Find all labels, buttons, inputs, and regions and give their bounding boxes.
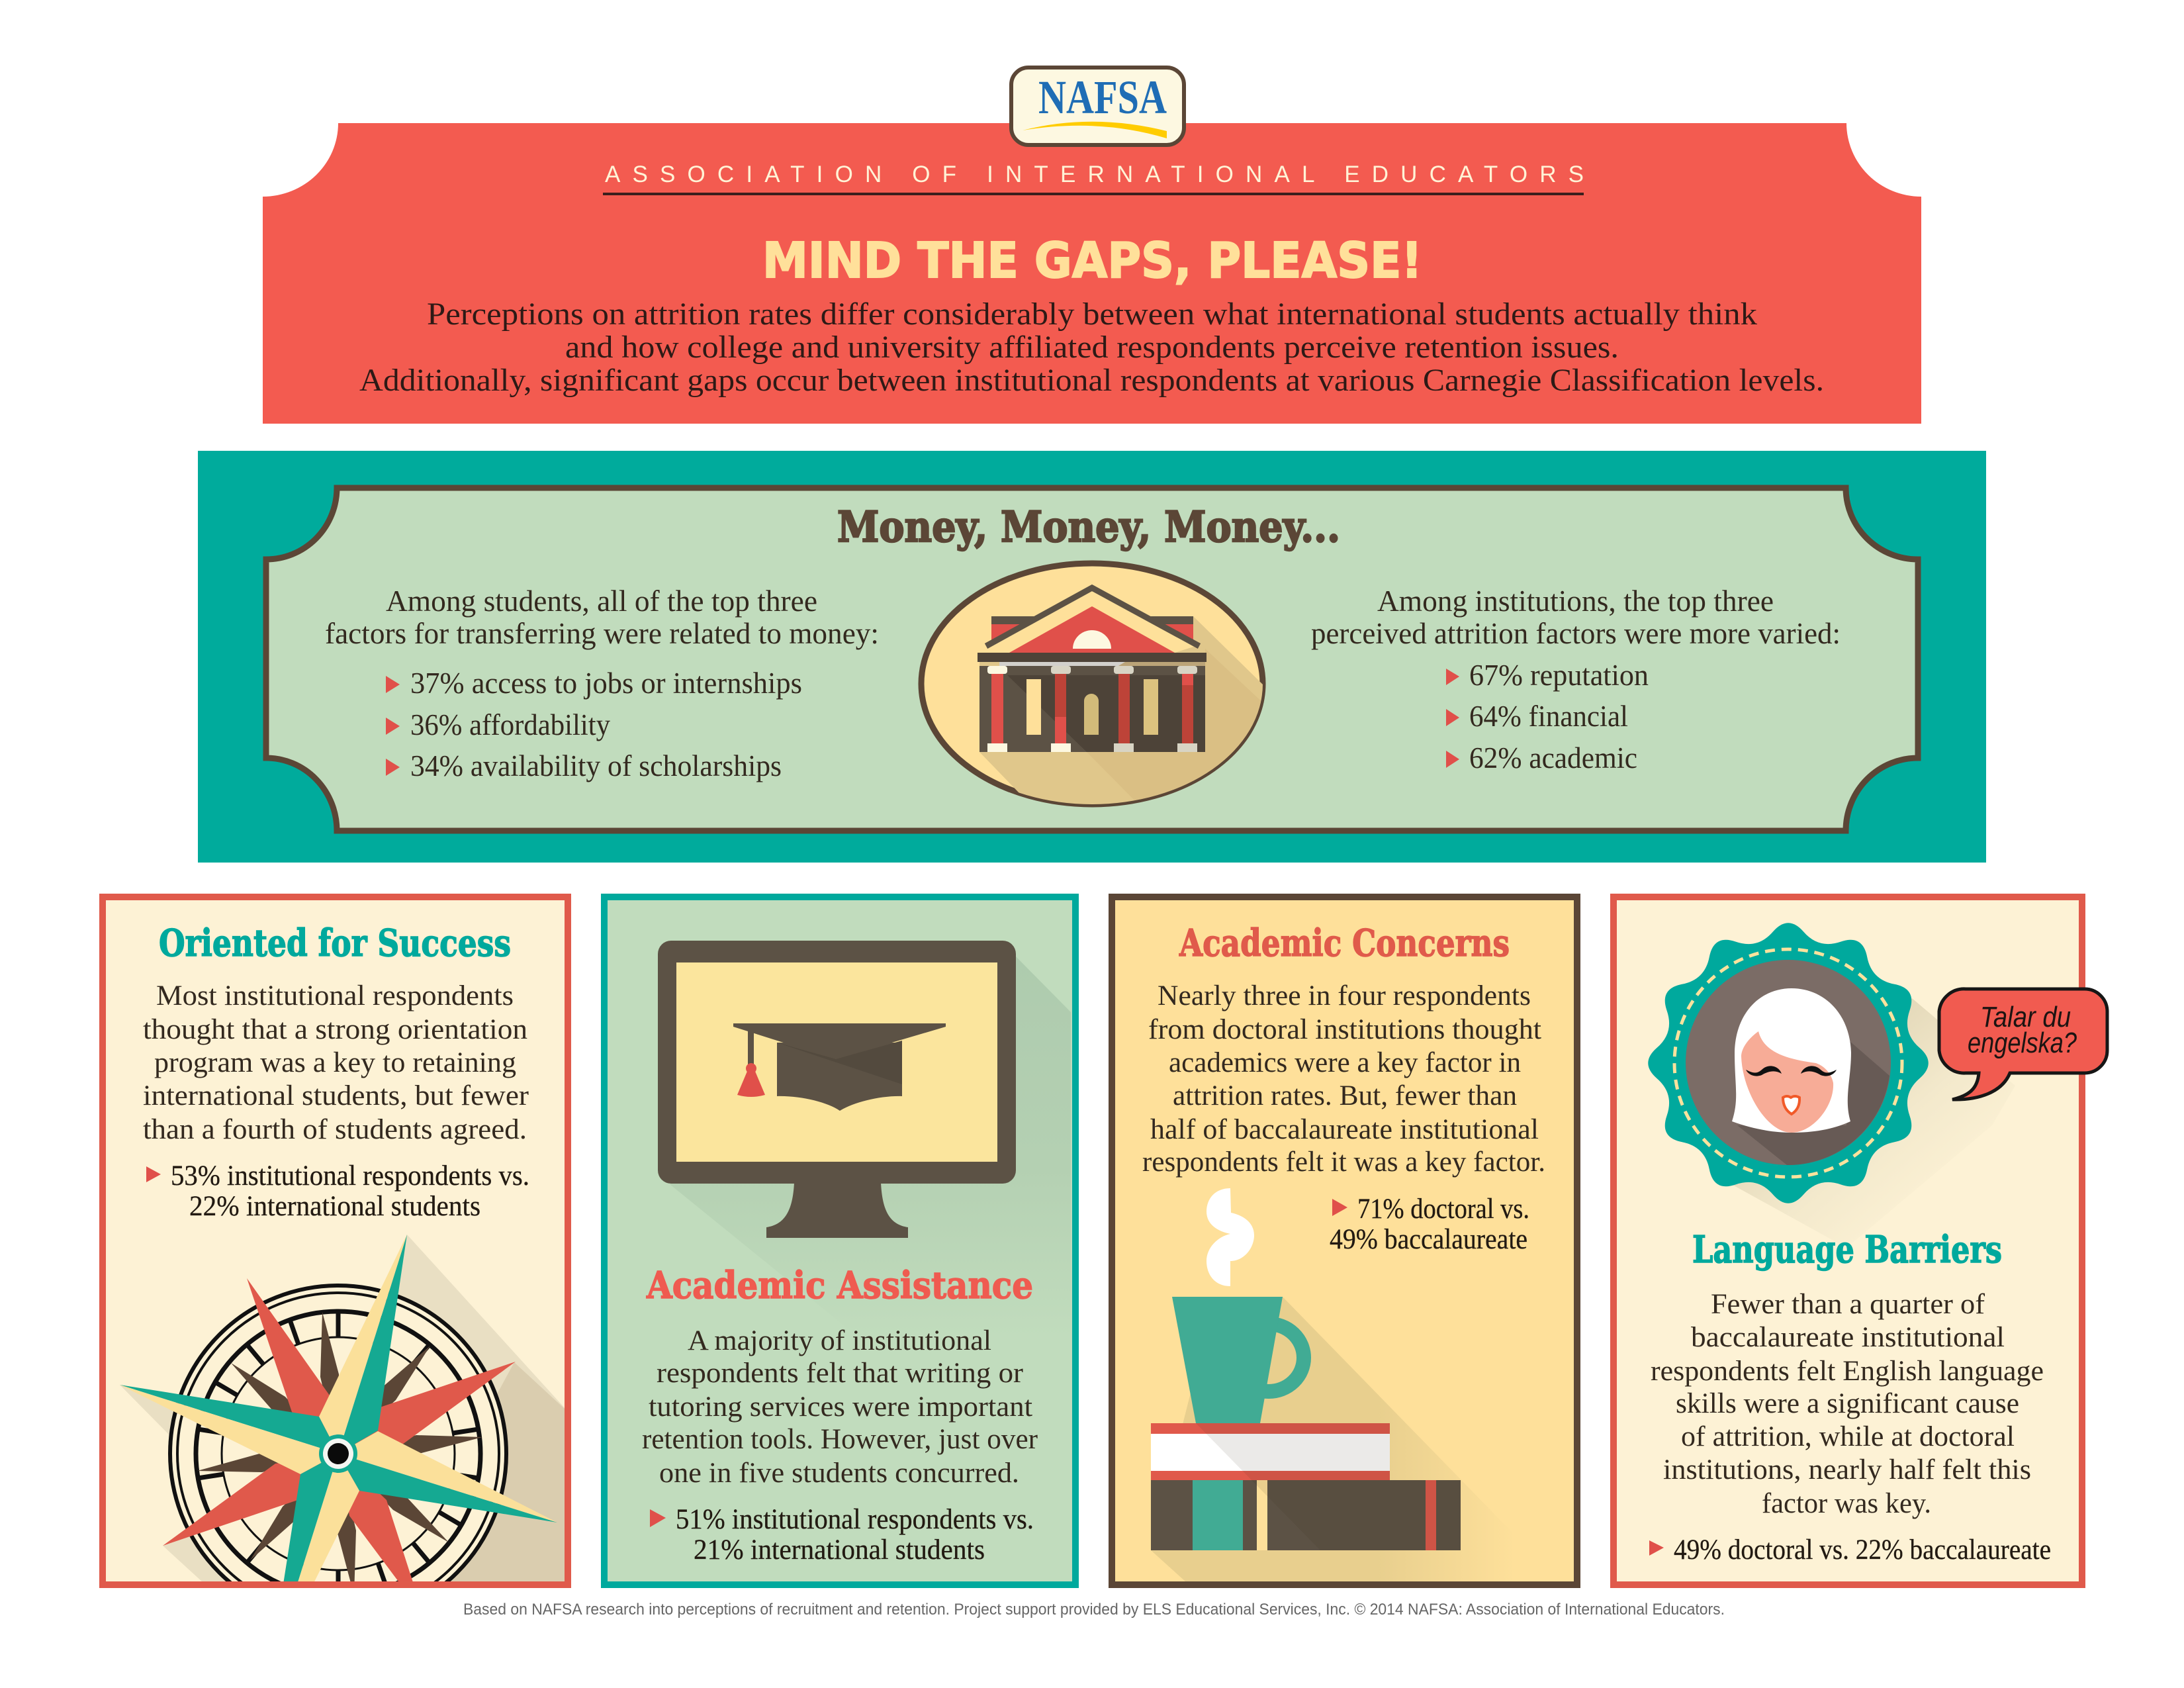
list: student bullets: 34% availability of scholarships <box>410 749 782 782</box>
callout: speech bubble <box>1939 989 2107 1100</box>
text: institutions factors: Among institutions, the top three <box>1377 585 1774 618</box>
body: academic assistance: one in five students concurred. <box>659 1458 1019 1489</box>
body: academic concerns: Nearly three in four respondents <box>1158 980 1531 1011</box>
association tagline: ASSOCIATION OF INTERNATIONAL EDUCATORS <box>605 162 1584 187</box>
stat: oriented: 53% institutional respondents vs. <box>171 1160 529 1192</box>
stat: academic assistance: 21% international students <box>694 1534 985 1566</box>
text: students factors: factors for transferring were related to money: <box>325 617 879 650</box>
text: students factors: Among students, all of the top three <box>386 585 817 618</box>
body: academic concerns: attrition rates. But, fewer than <box>1173 1080 1517 1111</box>
header banner <box>263 123 1921 424</box>
icon: coffee cup on books <box>1151 1188 1465 1581</box>
title: MIND THE GAPS, PLEASE! <box>762 232 1422 289</box>
list: institution bullets: 67% reputation <box>1469 659 1649 692</box>
logo: NAFSA: NAFSA <box>1038 71 1167 124</box>
body: oriented: thought that a strong orientation <box>143 1014 527 1045</box>
panel: language barriers <box>1614 897 2107 1585</box>
body: language barriers: respondents felt English language <box>1651 1356 2044 1387</box>
body: academic assistance: respondents felt that writing or <box>657 1358 1023 1389</box>
panel: oriented for success <box>103 897 568 1673</box>
icon: university building <box>919 560 1265 808</box>
body: academic concerns: half of baccalaureate institutional <box>1150 1114 1539 1145</box>
panel: academic assistance <box>604 897 1075 1585</box>
stat: academic concerns: 49% baccalaureate <box>1330 1224 1527 1255</box>
list: student bullets: 36% affordability <box>410 708 610 741</box>
icon: monitor with graduation cap <box>658 941 1016 1238</box>
intro text: and how college and university affiliated respondents perceive retention issues. <box>565 330 1619 365</box>
body: language barriers: Fewer than a quarter of <box>1711 1289 1985 1320</box>
body: oriented: Most institutional respondents <box>156 980 514 1011</box>
callout: speech bubble: Talar du <box>1980 1001 2071 1033</box>
list: institution bullets <box>1446 659 1649 774</box>
body: academic concerns: academics were a key factor in <box>1169 1047 1521 1078</box>
stat: academic concerns: 71% doctoral vs. <box>1357 1194 1529 1225</box>
heading: oriented: Oriented for Success <box>159 921 511 965</box>
panel: money <box>198 451 1986 863</box>
icon: compass rose <box>120 1235 565 1581</box>
stat: oriented: 22% international students <box>189 1191 480 1222</box>
body: language barriers <box>1651 1289 2044 1519</box>
callout: speech bubble: engelska? <box>1968 1027 2077 1059</box>
body: academic assistance: retention tools. However, just over <box>642 1424 1038 1455</box>
stat: academic concerns <box>1330 1194 1529 1255</box>
stat: oriented <box>146 1160 529 1222</box>
stat: language barriers: 49% doctoral vs. 22% baccalaureate <box>1674 1534 2051 1566</box>
list: student bullets: 37% access to jobs or internships <box>410 667 802 700</box>
intro text: Additionally, significant gaps occur between institutional respondents at various Carnegie Classification levels. <box>359 363 1824 398</box>
body: language barriers: of attrition, while at doctoral <box>1681 1421 2015 1452</box>
list: student bullets <box>386 667 802 782</box>
stat: academic assistance: 51% institutional respondents vs. <box>676 1504 1034 1535</box>
body: oriented: program was a key to retaining <box>154 1047 516 1078</box>
body: academic concerns: respondents felt it was a key factor. <box>1142 1147 1545 1178</box>
stat: academic assistance <box>650 1504 1034 1566</box>
text: institutions factors <box>1311 585 1841 650</box>
body: academic concerns: from doctoral institutions thought <box>1148 1014 1541 1045</box>
list: institution bullets: 64% financial <box>1469 700 1628 733</box>
body: academic concerns <box>1142 980 1545 1178</box>
intro text: Perceptions on attrition rates differ considerably between what international students actually think <box>427 297 1757 332</box>
panel: academic concerns <box>1112 897 1577 1585</box>
body: academic assistance <box>642 1325 1038 1489</box>
body: language barriers: factor was key. <box>1762 1488 1931 1519</box>
text: institutions factors: perceived attrition factors were more varied: <box>1311 617 1841 650</box>
body: language barriers: skills were a significant cause <box>1676 1388 2019 1419</box>
footer credit: Based on NAFSA research into perceptions of recruitment and retention. Project support provided by ELS Educational Services, Inc. © 2014 NAFSA: Association of International Educators. <box>463 1601 1725 1618</box>
heading: academic assistance: Academic Assistance <box>646 1264 1033 1307</box>
body: oriented: than a fourth of students agreed. <box>143 1114 527 1145</box>
list: institution bullets: 62% academic <box>1469 741 1637 774</box>
body: oriented <box>143 980 529 1145</box>
long shadow <box>1721 998 2015 1248</box>
long shadow <box>670 957 1071 1337</box>
intro text <box>359 297 1824 398</box>
icon: badge portrait <box>1648 923 1929 1203</box>
body: academic assistance: tutoring services were important <box>649 1391 1032 1423</box>
heading: academic concerns: Academic Concerns <box>1179 921 1510 965</box>
text: students factors <box>325 585 879 650</box>
heading: language barriers: Language Barriers <box>1692 1228 2002 1272</box>
heading: money: Money, Money, Money... <box>837 502 1340 552</box>
body: language barriers: baccalaureate institutional <box>1691 1322 2005 1353</box>
logo: NAFSA <box>1011 68 1184 145</box>
body: oriented: international students, but fewer <box>143 1080 529 1111</box>
body: academic assistance: A majority of institutional <box>688 1325 991 1356</box>
body: language barriers: institutions, nearly half felt this <box>1663 1454 2031 1485</box>
